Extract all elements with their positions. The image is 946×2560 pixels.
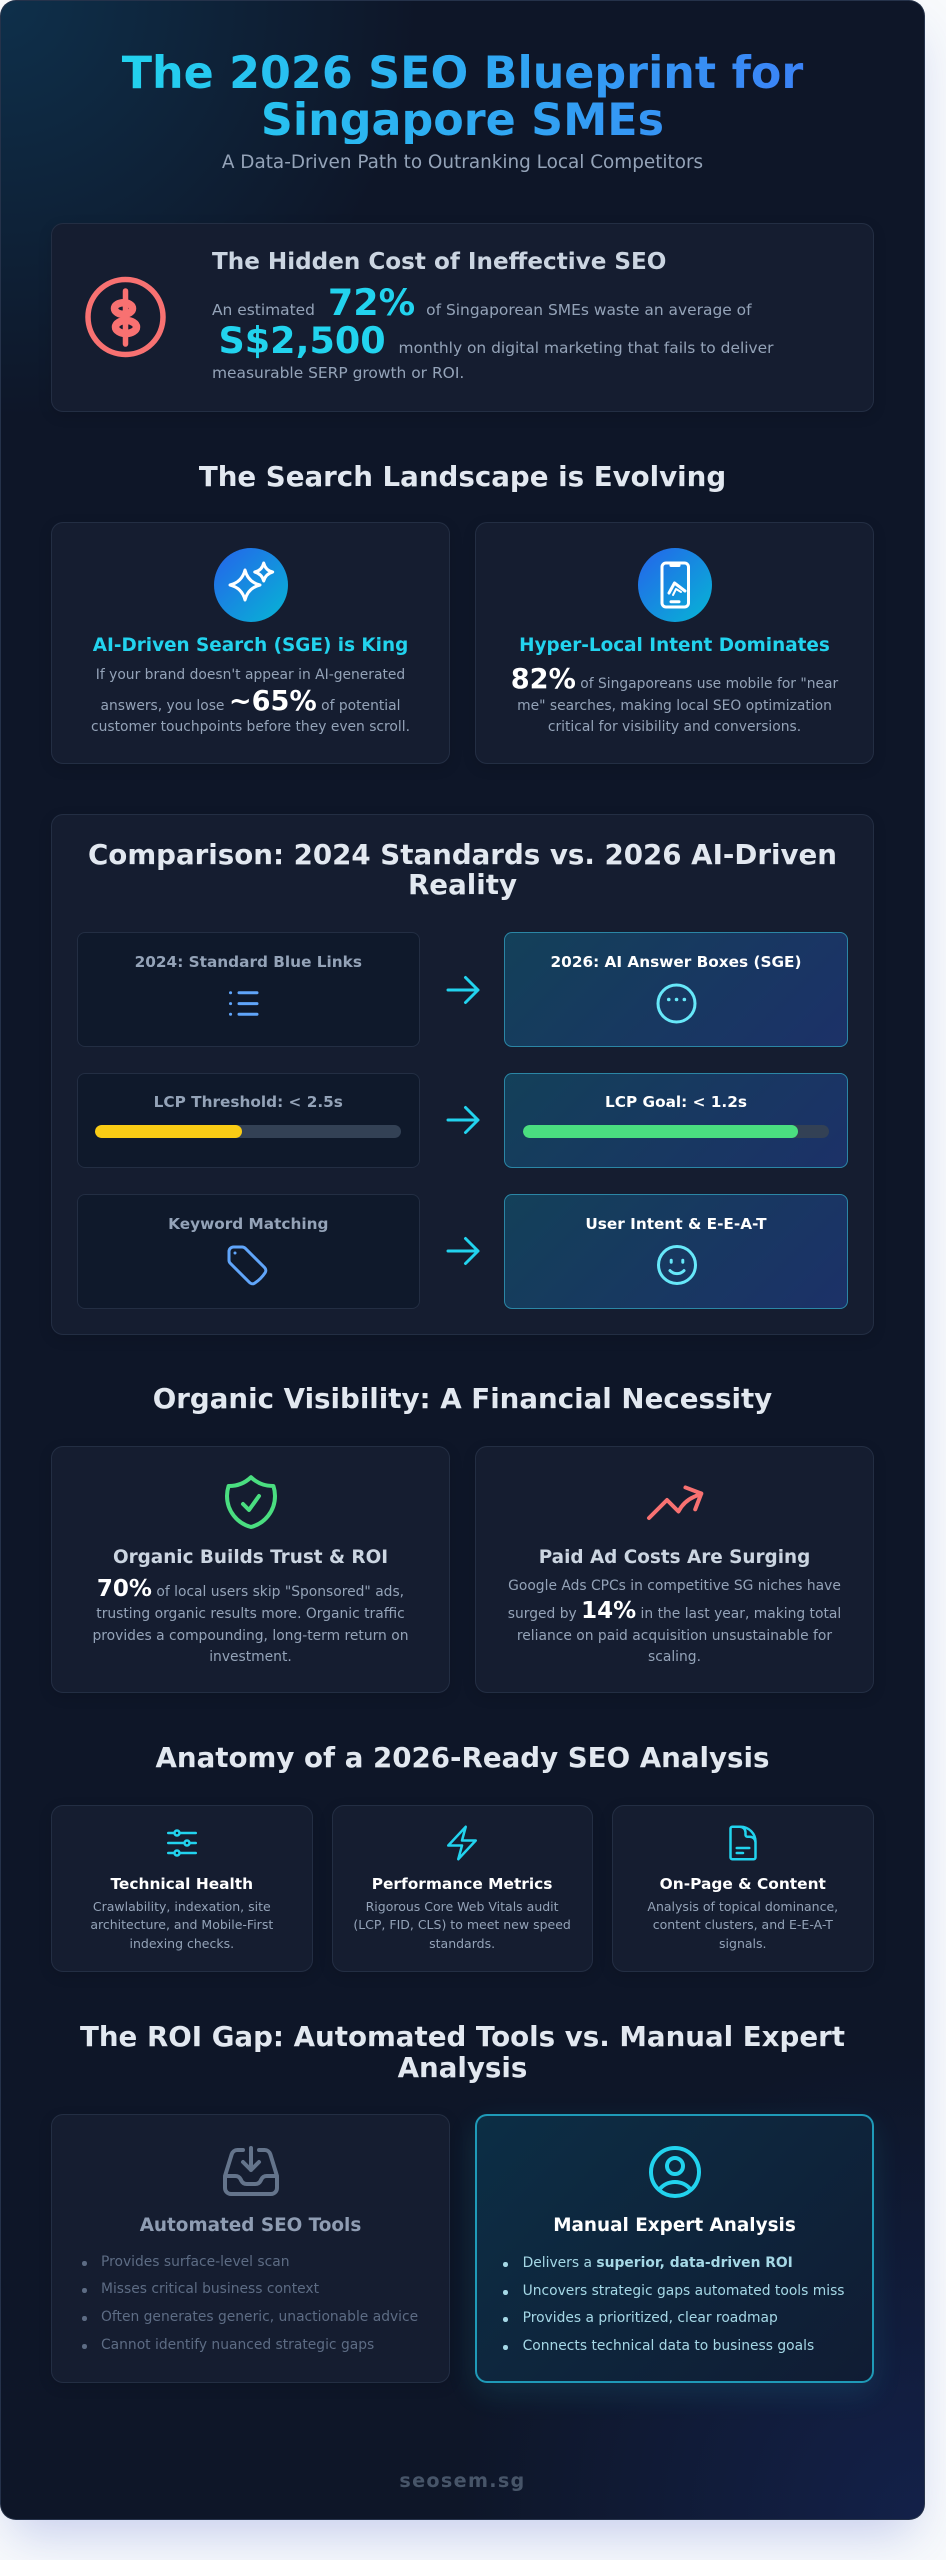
icon: sliders	[167, 1829, 197, 1857]
heading: On-Page & Content	[660, 1875, 826, 1893]
panel: hyper-local	[475, 522, 874, 764]
row 1 right: answer boxes	[504, 932, 848, 1047]
body text	[647, 1899, 838, 1951]
panel: AI search	[51, 522, 450, 764]
panel: organic trust	[51, 1446, 450, 1693]
list: Cannot identify nuanced strategic gaps	[101, 2337, 374, 2353]
row 2 left: LCP threshold	[77, 1072, 420, 1168]
label: User Intent & E-E-A-T	[585, 1215, 767, 1233]
icon: list	[229, 991, 258, 1016]
body text: Crawlability, indexation, site	[93, 1899, 271, 1914]
list: Provides a prioritized, clear roadmap	[523, 2310, 778, 2326]
body text: If your brand doesn't appear in AI-generated	[96, 667, 405, 683]
body text: provides a compounding, long-term return on	[92, 1628, 408, 1644]
footer brand: seosem.sg	[399, 2469, 526, 2492]
body text: 82% of Singaporeans use mobile for "near	[511, 664, 838, 695]
panel: automated tools	[51, 2114, 450, 2382]
heading: organic visibility: Organic Visibility: A Financial Necessity	[153, 1382, 772, 1415]
label: LCP Goal: < 1.2s	[605, 1093, 747, 1111]
body text	[353, 1899, 571, 1951]
body text: trusting organic results more. Organic traffic	[96, 1606, 405, 1622]
title	[118, 50, 808, 144]
heading: Reality	[408, 868, 517, 901]
heading: ROI gap	[80, 2020, 845, 2084]
stat text	[212, 280, 774, 382]
progress bar: 2.5s	[95, 1125, 401, 1138]
body text: me" searches, making local SEO optimization	[517, 698, 832, 714]
body text: 70% of local users skip "Sponsored" ads,	[97, 1576, 404, 1602]
title: The 2026 SEO Blueprint for	[122, 48, 803, 99]
icon: bolt	[447, 1825, 477, 1861]
arrow	[446, 1236, 480, 1266]
label: LCP Threshold: < 2.5s	[154, 1093, 343, 1111]
heading: Manual Expert Analysis	[553, 2215, 796, 2236]
panel: paid ad costs	[475, 1446, 874, 1693]
stat text: S$2,500 monthly on digital marketing that fails to deliver	[218, 318, 774, 362]
panel: performance metrics	[332, 1805, 593, 1972]
body text: reliance on paid acquisition unsustainable for	[517, 1628, 832, 1644]
body text: investment.	[209, 1649, 292, 1665]
body text	[92, 1576, 408, 1665]
heading: AI-Driven Search (SGE) is King	[93, 635, 408, 656]
list: Connects technical data to business goals	[523, 2338, 814, 2354]
row 3 left: keyword matching	[77, 1194, 420, 1309]
row 1 left: blue links	[77, 932, 420, 1047]
icon: shield check	[225, 1475, 277, 1529]
body text: scaling.	[648, 1649, 701, 1665]
heading: Hyper-Local Intent Dominates	[519, 635, 830, 656]
body text: Rigorous Core Web Vitals audit	[366, 1899, 559, 1914]
panel: technical health	[51, 1805, 313, 1972]
body text: surged by 14% in the last year, making total	[508, 1598, 841, 1624]
icon: smile	[657, 1245, 697, 1285]
icon: sparkles	[214, 548, 288, 622]
list: Uncovers strategic gaps automated tools miss	[523, 2283, 845, 2299]
panel: manual expert	[475, 2114, 874, 2382]
label: Keyword Matching	[168, 1215, 328, 1233]
heading: The Hidden Cost of Ineffective SEO	[212, 249, 666, 275]
icon: trending up	[646, 1485, 704, 1520]
stat text: An estimated 72% of Singaporean SMEs waste an average of	[212, 280, 752, 324]
body text: answers, you lose ~65% of potential	[101, 686, 400, 717]
panel: comparison	[51, 814, 874, 1335]
list	[82, 2254, 418, 2353]
body text	[91, 667, 410, 735]
icon: chat dots	[656, 984, 696, 1024]
body text	[90, 1899, 273, 1951]
heading: landscape: The Search Landscape is Evolving	[199, 460, 726, 493]
heading: ROI gap: The ROI Gap: Automated Tools vs. Manual Expert	[80, 2020, 845, 2053]
list: Often generates generic, unactionable advice	[101, 2309, 418, 2325]
heading: Automated SEO Tools	[140, 2215, 361, 2236]
icon: document	[729, 1826, 757, 1860]
icon: tag	[228, 1246, 268, 1286]
panel: on-page content	[612, 1805, 874, 1972]
panel: hidden cost	[51, 223, 874, 412]
icon: user circle	[649, 2146, 701, 2198]
list: Delivers a superior, data-driven ROI	[523, 2255, 793, 2271]
arrow	[446, 1106, 480, 1134]
heading: Performance Metrics	[372, 1875, 552, 1893]
heading: Technical Health	[110, 1875, 253, 1893]
body text: Analysis of topical dominance,	[647, 1899, 838, 1914]
heading: ROI gap: Analysis	[398, 2051, 527, 2084]
row 3 right: user intent	[504, 1194, 848, 1309]
icon: inbox	[223, 2146, 279, 2196]
icon: dollar circle	[85, 276, 166, 358]
list	[503, 2255, 845, 2354]
body text: content clusters, and E-E-A-T	[653, 1917, 833, 1932]
heading: Paid Ad Costs Are Surging	[539, 1546, 810, 1568]
label: 2024: Standard Blue Links	[135, 953, 362, 971]
subtitle: A Data-Driven Path to Outranking Local Competitors	[222, 152, 703, 172]
body text	[508, 1578, 841, 1665]
body text	[511, 664, 838, 735]
row 2 right: LCP goal	[504, 1072, 848, 1168]
heading: Organic Builds Trust & ROI	[113, 1546, 388, 1568]
heading	[88, 838, 837, 901]
body text: Google Ads CPCs in competitive SG niches have	[508, 1578, 841, 1594]
stat text: measurable SERP growth or ROI.	[212, 364, 464, 382]
heading: Comparison: 2024 Standards vs. 2026 AI-Driven	[88, 838, 837, 871]
body text: indexing checks.	[130, 1936, 234, 1951]
arrow	[446, 976, 480, 1004]
heading: anatomy: Anatomy of a 2026-Ready SEO Analysis	[156, 1741, 769, 1774]
label: 2026: AI Answer Boxes (SGE)	[551, 953, 801, 971]
title: Singapore SMEs	[261, 95, 664, 146]
icon: phone	[638, 548, 712, 622]
list: Provides surface-level scan	[101, 2254, 289, 2270]
body text: architecture, and Mobile-First	[90, 1917, 273, 1932]
body text: customer touchpoints before they even scroll.	[91, 719, 410, 735]
list: Misses critical business context	[101, 2281, 319, 2297]
body text: critical for visibility and conversions.	[548, 719, 801, 735]
progress bar: 1.2s	[523, 1125, 829, 1138]
body text: standards.	[429, 1936, 495, 1951]
body text: signals.	[719, 1936, 767, 1951]
body text: (LCP, FID, CLS) to meet new speed	[353, 1917, 571, 1932]
